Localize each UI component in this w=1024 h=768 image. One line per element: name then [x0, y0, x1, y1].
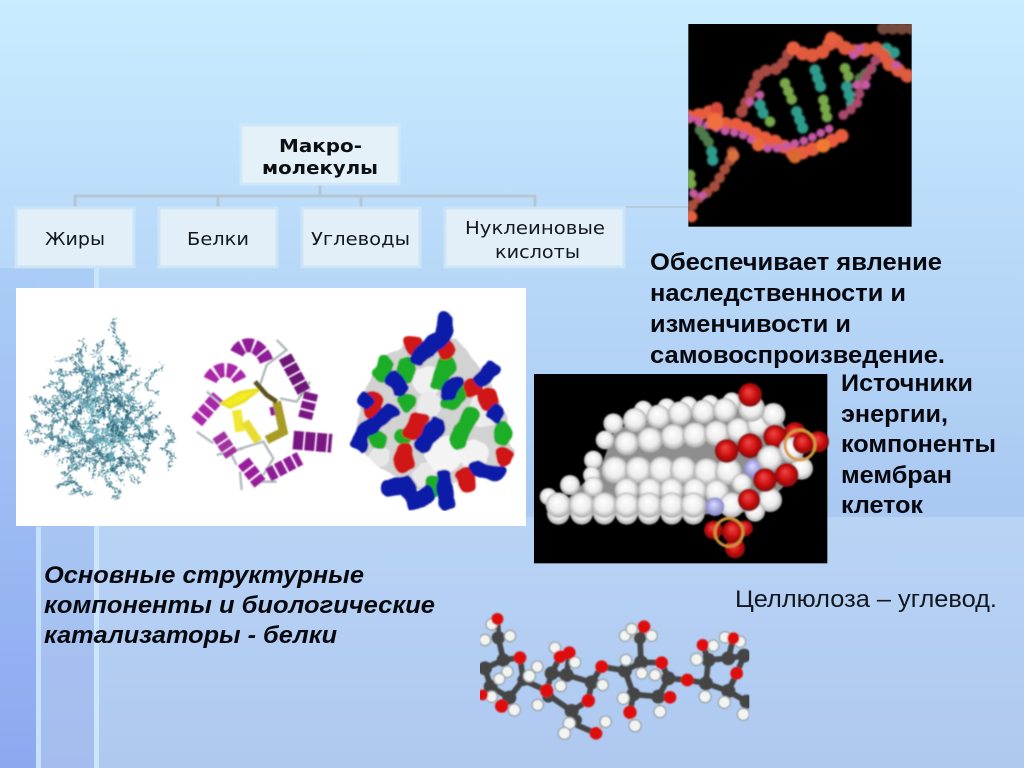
box: Жиры	[16, 208, 134, 267]
protein model: wireframe	[23, 315, 172, 497]
box: Белки: Белки	[187, 229, 249, 250]
text: DNA function	[650, 249, 945, 369]
image: cellulose ball-and-stick model	[477, 613, 754, 740]
text: DNA function: изменчивости и	[650, 311, 851, 338]
protein model: ribbon	[197, 340, 332, 490]
text: protein function: катализаторы - белки	[44, 622, 337, 649]
text: lipid function: компоненты	[841, 431, 996, 458]
text: lipid function: Источники	[841, 370, 973, 397]
text: DNA function: Обеспечивает явление	[650, 249, 942, 276]
text: protein function: компоненты и биологические	[44, 592, 435, 619]
text: lipid function	[841, 370, 996, 519]
connector lines of the hierarchy	[75, 185, 535, 207]
text: cellulose caption: Целлюлоза – углевод.	[735, 586, 997, 613]
text: DNA function: наследственности и	[650, 280, 906, 307]
protein model: surface	[355, 320, 513, 502]
box: Макро-молекулы	[241, 125, 399, 184]
box: Жиры: Жиры	[45, 229, 105, 250]
text: lipid function: клеток	[841, 492, 924, 519]
text: protein function	[44, 562, 435, 649]
box: Нуклеиновые кислоты: Нуклеиновые	[465, 218, 605, 239]
box: Нуклеиновые кислоты	[445, 208, 624, 267]
box: Макро-молекулы: молекулы	[262, 158, 378, 179]
text: protein function: Основные структурные	[44, 562, 364, 589]
text: lipid function: энергии,	[841, 401, 948, 428]
image: DNA double helix	[686, 24, 912, 227]
text: lipid function: мембран	[841, 462, 952, 489]
box: Углеводы	[302, 208, 420, 267]
panel: protein models	[16, 288, 526, 526]
image: lipid space-filling model	[534, 374, 829, 563]
box: Нуклеиновые кислоты: кислоты	[495, 242, 580, 263]
box: Белки	[159, 208, 277, 267]
box: Макро-молекулы: Макро-	[279, 136, 362, 157]
box: Углеводы: Углеводы	[311, 229, 410, 250]
text: DNA function: самовоспроизведение.	[650, 342, 945, 369]
